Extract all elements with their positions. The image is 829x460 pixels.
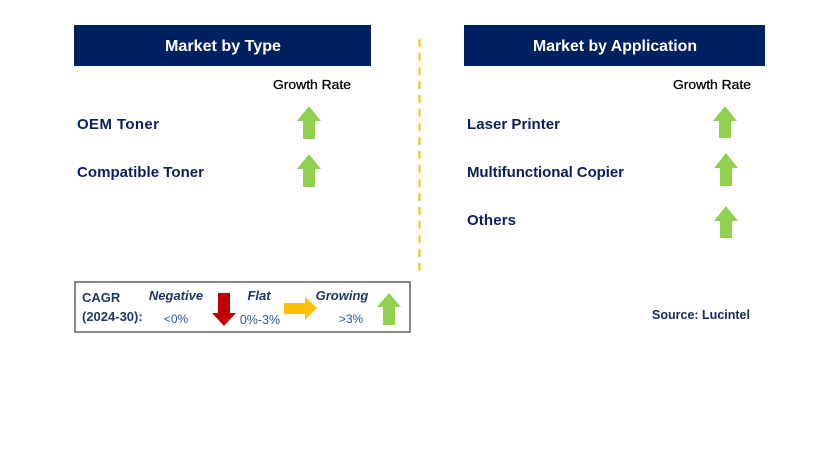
legend: flat range: 0%-3% xyxy=(240,313,280,327)
legend: negative range: <0% xyxy=(164,312,189,326)
legend: flat label: Flat xyxy=(247,288,271,303)
icon: up arrow OEM Toner xyxy=(297,106,321,139)
icon: up arrow Multifunctional Copier xyxy=(714,153,738,186)
legend title: CAGR xyxy=(82,290,121,305)
heading: market by type xyxy=(74,25,371,66)
icon: up arrow Compatible Toner xyxy=(297,154,321,187)
row label: Compatible Toner: Compatible Toner xyxy=(77,164,204,181)
icon: up arrow xyxy=(377,293,401,325)
heading: market by application xyxy=(464,25,765,66)
panel: market by application xyxy=(464,25,765,238)
icon: right arrow xyxy=(284,297,317,320)
legend: negative label: Negative xyxy=(149,288,203,303)
column label: growth rate: Growth Rate xyxy=(673,77,751,92)
icon: up arrow Others xyxy=(714,206,738,238)
divider: dashed line xyxy=(418,39,420,271)
legend: growing range: >3% xyxy=(339,312,364,326)
panel: market by type xyxy=(74,25,371,187)
legend: growing label: Growing xyxy=(316,288,368,303)
heading: market by type: Market by Type xyxy=(165,38,281,55)
icon: up arrow Laser Printer xyxy=(713,106,737,138)
source note: Source: Lucintel xyxy=(652,307,750,322)
row label: Laser Printer: Laser Printer xyxy=(467,116,560,133)
legend title: (2024-30): xyxy=(82,309,143,324)
row label: Multifunctional Copier: Multifunctional Copier xyxy=(467,164,624,181)
heading: market by application: Market by Application xyxy=(533,38,697,55)
column label: growth rate: Growth Rate xyxy=(273,77,351,92)
legend: CAGR xyxy=(75,282,410,332)
row label: Others: Others xyxy=(467,212,516,229)
icon: down arrow xyxy=(212,293,236,326)
row label: OEM Toner: OEM Toner xyxy=(77,116,159,133)
